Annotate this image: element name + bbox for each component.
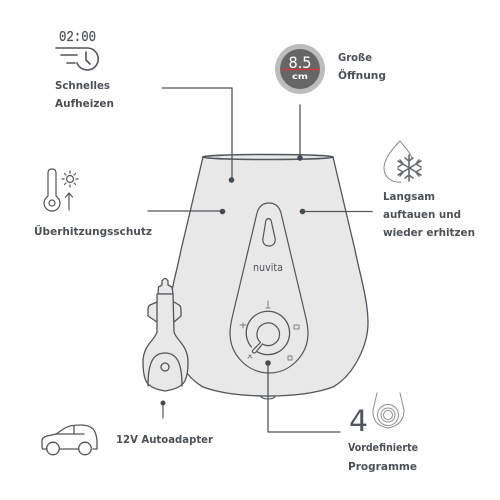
heading: Große Öffnung [338, 52, 386, 82]
brand name: nuvita [253, 261, 283, 274]
leader: Überhitzungsschutz [148, 209, 225, 214]
warmer foot [260, 395, 276, 399]
leader: Große Öffnung [297, 105, 303, 161]
icon: 4 programmes [349, 393, 404, 438]
adapter tip [158, 278, 173, 294]
heading: Große Öffnung: Große [338, 52, 372, 64]
icon: drop and snowflake [384, 141, 421, 182]
adapter arms [148, 302, 181, 322]
water level drop window [263, 218, 275, 246]
leader: 12V Autoadapter [160, 400, 166, 418]
heading: Große Öffnung: Öffnung [338, 68, 386, 82]
heading: Langsam auftauen und wieder erhitzen [383, 191, 475, 239]
heading: Vordefinierte Programme [348, 442, 418, 473]
product: bottle warmer [168, 154, 368, 399]
heading: Langsam auftauen und wieder erhitzen: Langsam [383, 191, 435, 203]
heading: Schnelles Aufheizen: Aufheizen [55, 98, 114, 110]
heading: Langsam auftauen und wieder erhitzen: wieder erhitzen [383, 227, 475, 239]
icon: thermometer and sun [44, 169, 78, 211]
program icons [240, 301, 299, 360]
adapter button [161, 363, 169, 371]
speed lines and clock [56, 48, 98, 70]
icon: 4 programmes: 4 [349, 404, 368, 438]
heading: Langsam auftauen und wieder erhitzen: auftauen und [383, 209, 461, 221]
warmer body [168, 157, 368, 396]
leader: Vordefinierte Programme [265, 360, 340, 432]
adapter window [148, 353, 182, 386]
leader: Schnelles Aufheizen [162, 88, 234, 183]
heading: Vordefinierte Programme: Vordefinierte [348, 442, 418, 454]
dial outer ring [246, 311, 290, 355]
icon: 8.5 cm opening [275, 44, 325, 94]
dial knob [252, 323, 280, 353]
heading: Schnelles Aufheizen: Schnelles [55, 80, 110, 92]
car adapter [143, 278, 188, 391]
icon: clock speed [56, 29, 98, 70]
heading: Überhitzungsschutz: Überhitzungsschutz [34, 224, 152, 238]
leader: Langsam auftauen [300, 209, 372, 214]
adapter body [143, 294, 188, 391]
heading: 12V Autoadapter: 12V Autoadapter [116, 434, 214, 446]
icon: 8.5 cm opening: cm [292, 72, 308, 81]
control panel outline [230, 203, 308, 373]
icon: car [42, 425, 97, 455]
icon: 8.5 cm opening: 8.5 [288, 53, 312, 72]
heading: Schnelles Aufheizen [55, 80, 114, 110]
digital time: 02:00 [59, 29, 96, 46]
heading: Vordefinierte Programme: Programme [348, 461, 417, 473]
warmer rim [202, 154, 334, 160]
